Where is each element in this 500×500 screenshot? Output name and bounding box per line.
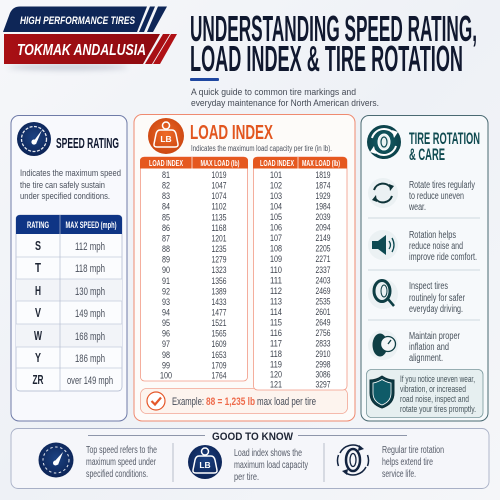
load table: 81 to 100: 89 — [162, 255, 170, 266]
speed rating description — [20, 168, 121, 202]
speed rating table: 149 mph — [75, 308, 105, 320]
load table: 101 to 121: 112 — [270, 286, 282, 297]
load table: 101 to 121: 114 — [270, 307, 282, 318]
speed rating table: T — [35, 261, 41, 275]
speed rating description: the tire can safely sustain — [20, 180, 105, 191]
load table: 81 to 100: 83 — [162, 191, 170, 202]
fact: load index — [188, 445, 308, 483]
load table: 101 to 121: 113 — [270, 296, 282, 308]
load table: 101 to 121: 2833 — [316, 338, 330, 350]
load table: 101 to 121: 118 — [270, 349, 282, 360]
speed rating table: over 149 mph — [67, 375, 113, 387]
speed rating table: 118 mph — [75, 263, 105, 275]
care item: rotate — [368, 178, 475, 213]
fact: top speed: maximum speed under — [86, 457, 156, 468]
load index description: Indicates the maximum load capacity per tire (in lb). — [191, 144, 332, 153]
speed rating table: Y — [35, 351, 41, 365]
icon: shield — [370, 376, 394, 408]
care callout text: road noise, inspect and — [400, 394, 469, 404]
subtitle: everyday maintenance for North American drivers. — [191, 98, 379, 108]
title — [190, 8, 477, 79]
load table: 81 to 100: 1168 — [212, 223, 226, 234]
care callout text: rotate your tires promptly. — [400, 404, 476, 414]
brand ribbon: tokmak andalusia: TOKMAK ANDALUSIA — [17, 42, 146, 59]
care item: rotate: Rotate tires regularly — [409, 180, 475, 191]
load table: 101 to 121: 2649 — [316, 318, 330, 328]
load table: 81 to 100: 1764 — [212, 370, 226, 382]
example callout — [140, 388, 348, 414]
load table: 101 to 121: 2403 — [316, 276, 330, 286]
example text: 88 = 1,235 lb — [206, 396, 255, 408]
load table: 81 to 100: 1433 — [212, 297, 226, 308]
load table: 81 to 100: 1019 — [212, 170, 226, 181]
load table: 101 to 121 — [253, 157, 347, 390]
load table: 101 to 121: 1874 — [316, 180, 330, 192]
load table: 101 to 121: 121 — [270, 380, 282, 390]
load table: 101 to 121: LOAD INDEX — [260, 159, 294, 168]
example text: Example: — [172, 396, 204, 408]
load table: 81 to 100: 1235 — [212, 244, 226, 255]
care item: rotate: wear. — [408, 202, 426, 213]
load table: 101 to 121: 105 — [270, 212, 282, 223]
care item: inflation — [368, 330, 460, 364]
load table: 101 to 121: 2094 — [316, 222, 330, 234]
load table: 81 to 100: 94 — [162, 308, 170, 318]
icon: gauge — [38, 442, 74, 478]
load table: 101 to 121: 117 — [270, 338, 282, 350]
load table: 101 to 121: 110 — [270, 265, 282, 276]
load table: 81 to 100: 1389 — [212, 286, 226, 297]
panel: speed rating — [11, 116, 127, 421]
load table: 81 to 100: 1201 — [212, 234, 226, 244]
heading: good to know: GOOD TO KNOW — [212, 431, 294, 443]
fact: top speed: specified conditions. — [86, 469, 148, 480]
load table: 101 to 121: 115 — [270, 318, 282, 328]
load table: 81 to 100: 82 — [162, 181, 170, 192]
load table: 81 to 100: 81 — [162, 170, 170, 181]
load table: 81 to 100: 91 — [162, 276, 170, 287]
load table: 81 to 100: 84 — [162, 202, 170, 213]
speed rating description: under specified conditions. — [20, 191, 110, 202]
speed rating table: V — [35, 306, 41, 320]
load table: 101 to 121: 107 — [270, 233, 282, 244]
load table: 101 to 121: 2910 — [316, 349, 330, 360]
care item: noise: Rotation helps — [409, 230, 456, 241]
load table: 81 to 100: 1047 — [212, 181, 226, 192]
fact: tire rotation: service life. — [382, 469, 416, 480]
load table: 81 to 100: 1102 — [212, 202, 226, 213]
speed rating table: W — [34, 329, 42, 343]
header badge — [3, 6, 177, 70]
load table: 101 to 121: 106 — [270, 222, 282, 234]
load table: 81 to 100: 98 — [162, 350, 170, 361]
speed rating description: Indicates the maximum speed — [20, 168, 121, 179]
fact: tire rotation: helps extend tire — [382, 457, 433, 468]
speed rating table: 168 mph — [75, 331, 105, 343]
load table: 101 to 121: 2337 — [316, 265, 330, 276]
load table: 101 to 121: 2149 — [316, 233, 330, 244]
care item: inflation: alignment. — [409, 353, 443, 364]
load table: 101 to 121: 2998 — [316, 359, 330, 370]
load table: 101 to 121: 101 — [270, 170, 282, 181]
icon: tire rotation — [367, 125, 401, 159]
load table: 101 to 121: 2205 — [316, 244, 330, 254]
fact: top speed: Top speed refers to the — [86, 445, 157, 456]
heading: speed rating: SPEED RATING — [56, 135, 119, 152]
speed rating table: S — [35, 239, 41, 253]
care callout text — [400, 374, 476, 414]
icon: weight: LB — [199, 460, 211, 470]
load table: 81 to 100: 99 — [162, 360, 170, 371]
panel: tire rotation and care — [361, 116, 488, 421]
load table: 81 to 100: 88 — [162, 244, 170, 255]
care item: noise — [368, 230, 477, 263]
heading: tire rotation and care — [409, 130, 480, 164]
heading: tire rotation and care: & CARE — [409, 146, 445, 164]
icon: weight LB: LB — [160, 134, 172, 144]
care item: inspect: everyday driving. — [409, 304, 463, 315]
brand ribbon: tokmak andalusia — [4, 34, 177, 64]
load table: 101 to 121: MAX LOAD (lb) — [302, 159, 340, 168]
icon: weight LB — [148, 118, 184, 154]
load table: 101 to 121: 103 — [270, 191, 282, 202]
load table: 101 to 121: 2756 — [316, 328, 330, 339]
load table: 81 to 100: 1653 — [212, 350, 226, 361]
load table: 81 to 100: 97 — [162, 339, 170, 350]
load table: 81 to 100: 90 — [162, 265, 170, 276]
load table: 81 to 100: 1356 — [212, 276, 226, 287]
icon: check mark — [147, 392, 165, 410]
load table: 101 to 121: 109 — [270, 254, 282, 265]
load table: 81 to 100: 1709 — [212, 360, 226, 371]
speed rating table: ZR — [32, 373, 44, 387]
load table: 81 to 100: 93 — [162, 297, 170, 308]
speed rating table: 130 mph — [75, 286, 105, 298]
load table: 81 to 100: 100 — [160, 370, 172, 382]
load table: 101 to 121: 1929 — [316, 191, 330, 202]
care callout text: If you notice uneven wear, — [400, 374, 475, 384]
subtitle — [191, 87, 379, 108]
load table: 81 to 100: 1521 — [212, 318, 226, 329]
subtitle: A quick guide to common tire markings and — [191, 87, 356, 97]
fact: tire rotation: Regular tire rotation — [382, 445, 444, 456]
load table: 101 to 121: 120 — [270, 370, 282, 380]
load table: 101 to 121: 104 — [270, 202, 282, 212]
speed rating table — [16, 215, 122, 391]
fact: load index: per tire. — [234, 472, 259, 483]
load table: 81 to 100 — [140, 157, 248, 382]
speed rating table: 112 mph — [75, 241, 105, 253]
care item: inspect — [368, 279, 465, 315]
load table: 101 to 121: 3086 — [316, 370, 330, 380]
load table: 81 to 100: 1135 — [212, 212, 226, 223]
care item: inflation: inflation and — [409, 342, 449, 353]
care item: inflation: Maintain proper — [409, 331, 460, 342]
load table: 81 to 100: 87 — [162, 234, 170, 244]
speed rating table: MAX SPEED (mph) — [66, 220, 116, 230]
load table: 81 to 100: 86 — [162, 223, 170, 234]
load table: 81 to 100: 1609 — [212, 339, 226, 350]
heading: load index: LOAD INDEX — [190, 122, 273, 144]
fact: tire rotation — [337, 445, 444, 480]
panel: load index — [134, 114, 355, 421]
load table: 101 to 121: 2039 — [316, 212, 330, 223]
load table: 81 to 100: 1323 — [212, 265, 226, 276]
fact: load index: Load index shows the — [234, 448, 302, 459]
load table: 81 to 100: LOAD INDEX — [149, 159, 183, 168]
panel: good to know — [11, 428, 489, 488]
load table: 101 to 121: 2601 — [316, 307, 330, 318]
care item: inspect: Inspect tires — [409, 281, 448, 292]
icon: speedometer — [17, 122, 51, 156]
load table: 81 to 100: 92 — [162, 286, 170, 297]
brand ribbon: high performance tires: HIGH PERFORMANCE TIRES — [20, 15, 135, 27]
load table: 81 to 100: 95 — [162, 318, 170, 329]
care item: rotate: to reduce uneven — [409, 191, 464, 202]
speed rating table: RATING — [27, 220, 49, 230]
brand ribbon: high performance tires — [3, 6, 167, 32]
load table: 101 to 121: 119 — [270, 359, 282, 370]
fact: top speed — [38, 442, 157, 480]
load table: 101 to 121: 111 — [270, 276, 282, 286]
load table: 101 to 121: 102 — [270, 180, 282, 192]
load table: 81 to 100: 1565 — [212, 329, 226, 340]
care callout — [366, 370, 483, 418]
load table: 101 to 121: 2271 — [316, 254, 330, 265]
load table: 101 to 121: 1984 — [316, 202, 330, 212]
load table: 81 to 100: 85 — [162, 212, 170, 223]
load table: 101 to 121: 116 — [270, 328, 282, 339]
fact: load index: maximum load capacity — [234, 460, 308, 471]
load table: 101 to 121: 2469 — [316, 286, 330, 297]
care callout text: vibration, or increased — [400, 384, 466, 394]
example text — [172, 396, 316, 408]
load table: 101 to 121: 1819 — [316, 170, 330, 181]
icon: tire — [337, 445, 369, 475]
load table: 81 to 100: MAX LOAD (lb) — [200, 159, 240, 168]
title accent bar — [190, 78, 219, 81]
load table: 81 to 100: 1477 — [212, 308, 226, 318]
load table: 101 to 121: 108 — [270, 244, 282, 254]
load table: 81 to 100: 1074 — [212, 191, 226, 202]
load table: 101 to 121: 3297 — [316, 380, 330, 390]
load table: 81 to 100: 1279 — [212, 255, 226, 266]
care item: inspect: routinely for safer — [409, 293, 465, 304]
example text: max load per tire — [257, 396, 316, 408]
speed rating table: 186 mph — [75, 353, 105, 365]
care item: noise: reduce noise and — [409, 241, 463, 252]
load table: 101 to 121: 2535 — [316, 296, 330, 308]
load table: 81 to 100: 96 — [162, 329, 170, 340]
speed rating table: H — [35, 284, 41, 298]
